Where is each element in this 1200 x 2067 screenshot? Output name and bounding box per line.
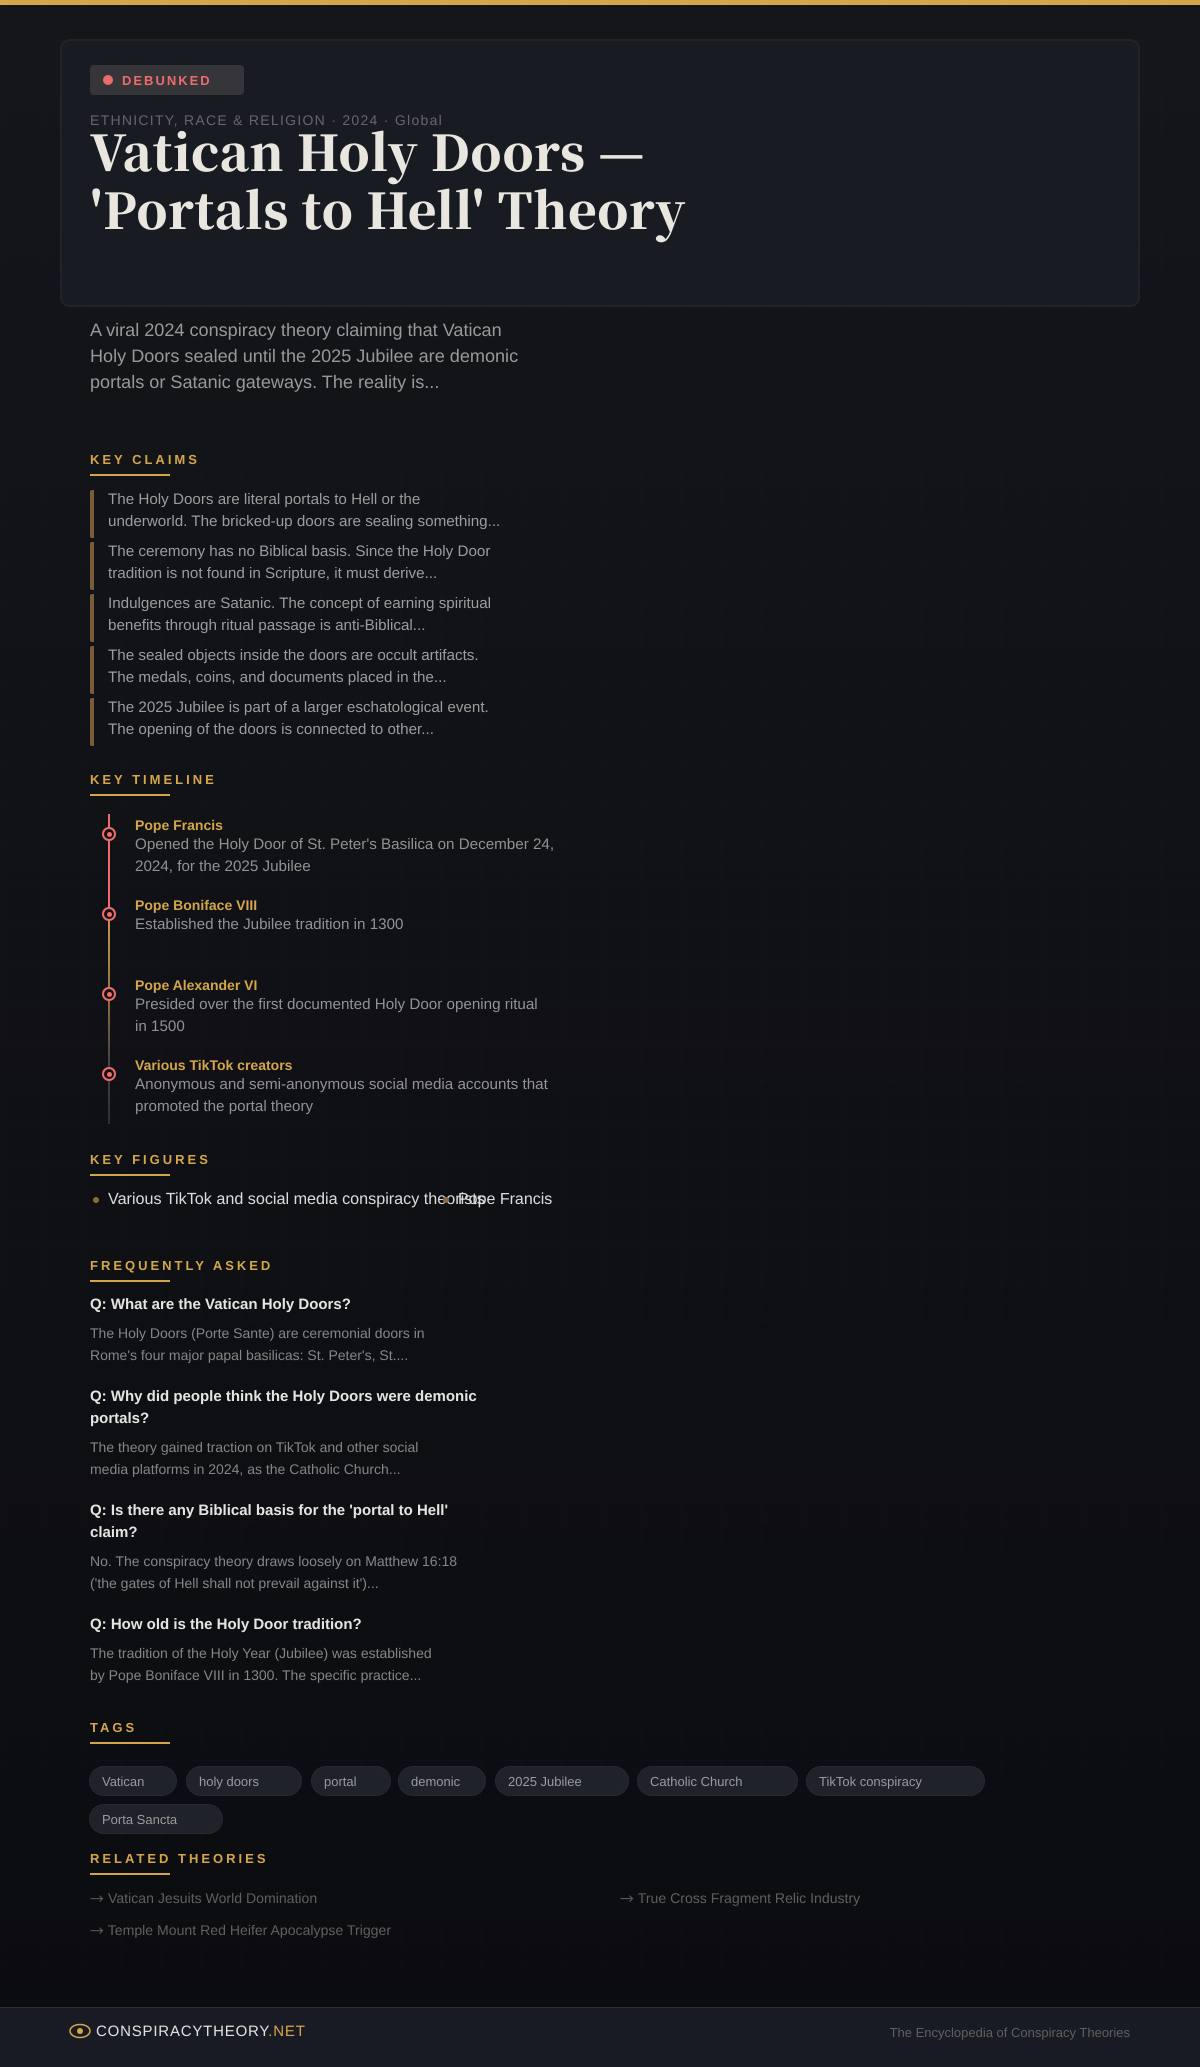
panel: FAQ [90, 1296, 477, 1683]
entry text [135, 817, 554, 875]
entry text: 2024, for the 2025 Jubilee [135, 858, 311, 875]
tag [89, 1804, 223, 1834]
FAQ 4 [90, 1616, 432, 1683]
entry text [135, 1057, 548, 1115]
claim 5: The opening of the doors is connected to other... [108, 721, 434, 738]
tag [89, 1766, 177, 1796]
FAQ 3: ('the gates of Hell shall not prevail against it')... [90, 1575, 379, 1591]
claim 1: underworld. The bricked-up doors are sealing something... [108, 513, 500, 530]
entry text: Pope Alexander VI [135, 977, 257, 993]
claim 4: The medals, coins, and documents placed in the... [108, 669, 447, 686]
FAQ 4: The tradition of the Holy Year (Jubilee) was established [90, 1645, 432, 1661]
entry text: Established the Jubilee tradition in 1300 [135, 916, 404, 933]
logo wordmark: CONSPIRACYTHEORY.NET [96, 2023, 306, 2040]
tag list [89, 1766, 985, 1834]
claim 3: benefits through ritual passage is anti-Biblical... [108, 617, 425, 634]
tag [398, 1766, 486, 1796]
FAQ 1 [90, 1296, 425, 1363]
timeline [102, 814, 554, 1124]
FAQ 2 [90, 1388, 477, 1477]
tag: Porta Sancta [102, 1812, 177, 1827]
FAQ 1: Rome's four major papal basilicas: St. Peter's, St.... [90, 1347, 408, 1363]
title: 'Portals to Hell' Theory [90, 174, 686, 244]
timeline item: Pope Francis [102, 817, 554, 875]
entry text: Pope Boniface VIII [135, 897, 257, 913]
tag: portal [324, 1774, 357, 1789]
related theories links [90, 1889, 860, 1941]
icon: eye logo [69, 2024, 91, 2038]
related link 2: → True Cross Fragment Relic Industry [620, 1889, 860, 1909]
heading: tags: TAGS [90, 1720, 137, 1735]
tag: holy doors [199, 1774, 259, 1789]
claim 2: The ceremony has no Biblical basis. Since the Holy Door [108, 543, 490, 560]
entry text: Anonymous and semi-anonymous social media accounts that [135, 1076, 548, 1093]
entry text: Presided over the first documented Holy Door opening ritual [135, 996, 538, 1013]
FAQ 3: No. The conspiracy theory draws loosely on Matthew 16:18 [90, 1553, 457, 1569]
timeline item: Pope Alexander VI [102, 977, 538, 1035]
tag: TikTok conspiracy [819, 1774, 922, 1789]
tag: Vatican [102, 1774, 144, 1789]
entry text: Opened the Holy Door of St. Peter's Basilica on December 24, [135, 836, 554, 853]
footer tagline: The Encyclopedia of Conspiracy Theories [890, 2025, 1130, 2040]
tag: demonic [411, 1774, 460, 1789]
title: Vatican Holy Doors — [90, 116, 645, 186]
related link 3: → Temple Mount Red Heifer Apocalypse Trigger [90, 1921, 391, 1941]
heading: frequently asked: FREQUENTLY ASKED [90, 1258, 273, 1273]
tag [806, 1766, 985, 1796]
FAQ 4: by Pope Boniface VIII in 1300. The specific practice... [90, 1667, 421, 1683]
badge label: DEBUNKED [122, 73, 212, 88]
claim 5: The 2025 Jubilee is part of a larger eschatological event. [108, 699, 489, 716]
tag: 2025 Jubilee [508, 1774, 582, 1789]
related link 1: → Vatican Jesuits World Domination [90, 1889, 317, 1909]
entry text: promoted the portal theory [135, 1098, 313, 1115]
key figures list [93, 1190, 552, 1208]
timeline item: Various TikTok creators [102, 1057, 548, 1115]
claim 1: The Holy Doors are literal portals to Hell or the [108, 491, 420, 508]
lede text: portals or Satanic gateways. The reality is... [90, 372, 439, 392]
category meta line: ETHNICITY, RACE & RELIGION · 2024 · Global [90, 112, 443, 128]
timeline item: Pope Boniface VIII [102, 897, 404, 933]
tag [311, 1766, 391, 1796]
FAQ 1: Q: What are the Vatican Holy Doors? [90, 1296, 351, 1313]
heading: key claims: KEY CLAIMS [90, 452, 200, 467]
panel: key claims list [90, 490, 500, 746]
claim 1 [90, 490, 510, 538]
FAQ 4: Q: How old is the Holy Door tradition? [90, 1616, 362, 1633]
entry text: in 1500 [135, 1018, 185, 1035]
badge: debunked [90, 65, 244, 95]
entry text [135, 897, 404, 933]
FAQ 2: media platforms in 2024, as the Catholic Church... [90, 1461, 400, 1477]
marker [102, 987, 116, 1001]
claim 5 [90, 698, 510, 746]
panel: header card [60, 39, 1140, 307]
FAQ 3: claim? [90, 1524, 138, 1541]
lede text: Holy Doors sealed until the 2025 Jubilee are demonic [90, 346, 518, 366]
icon: status dot [103, 75, 113, 85]
figure bullet 2 [443, 1197, 449, 1203]
tag [186, 1766, 302, 1796]
tag [637, 1766, 798, 1796]
marker [102, 1067, 116, 1081]
marker [102, 827, 116, 841]
claim 4 [90, 646, 510, 694]
FAQ 1: The Holy Doors (Porte Sante) are ceremonial doors in [90, 1325, 425, 1341]
FAQ 2: portals? [90, 1410, 149, 1427]
claim 4: The sealed objects inside the doors are occult artifacts. [108, 647, 479, 664]
heading: related theories: RELATED THEORIES [90, 1851, 268, 1866]
figure name 2: Pope Francis [458, 1191, 552, 1208]
claim 2: tradition is not found in Scripture, it must derive... [108, 565, 437, 582]
claim 3: Indulgences are Satanic. The concept of earning spiritual [108, 595, 491, 612]
FAQ 2: The theory gained traction on TikTok and other social [90, 1439, 418, 1455]
lede text: A viral 2024 conspiracy theory claiming that Vatican [90, 320, 502, 340]
timeline line [108, 814, 110, 1124]
entry text: Various TikTok creators [135, 1057, 292, 1073]
FAQ 3 [90, 1502, 457, 1591]
marker [102, 907, 116, 921]
claim 2 [90, 542, 510, 590]
FAQ 3: Q: Is there any Biblical basis for the 'portal to Hell' [90, 1502, 448, 1519]
title [90, 116, 686, 244]
figure bullet 1 [93, 1197, 99, 1203]
entry text: Pope Francis [135, 817, 223, 833]
tag [495, 1766, 629, 1796]
claim 3 [90, 594, 510, 642]
entry text [135, 977, 538, 1035]
footer [0, 2007, 1200, 2067]
heading: key figures: KEY FIGURES [90, 1152, 211, 1167]
FAQ 2: Q: Why did people think the Holy Doors were demonic [90, 1388, 477, 1405]
lede text [90, 320, 518, 392]
tag: Catholic Church [650, 1774, 742, 1789]
figure name 1: Various TikTok and social media conspiracy theorists [108, 1190, 485, 1208]
heading: key timeline: KEY TIMELINE [90, 772, 217, 787]
